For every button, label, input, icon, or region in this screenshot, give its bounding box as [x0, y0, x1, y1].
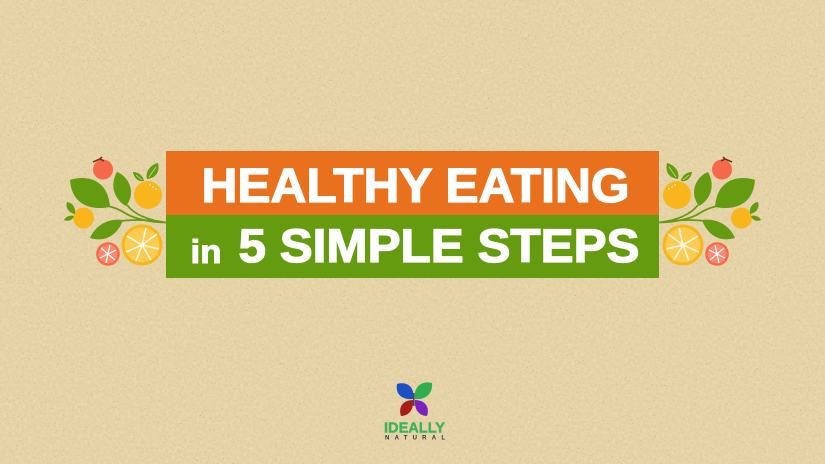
ornament: left fruit branch — [64, 157, 166, 266]
ornament: right fruit branch — [659, 157, 761, 266]
banner: green subheading: in — [190, 233, 222, 270]
logo wordmark: IDEALLY — [384, 420, 445, 436]
banner: orange heading: HEALTHY EATING — [202, 160, 630, 213]
title banner — [166, 151, 659, 278]
banner: green subheading: 5 SIMPLE STEPS — [238, 219, 640, 272]
banner: orange heading — [166, 151, 659, 215]
banner: green subheading — [166, 215, 659, 278]
icon: butterfly — [397, 382, 432, 416]
logo: Ideally Natural — [384, 382, 445, 442]
logo tagline: NATURAL — [385, 436, 445, 442]
